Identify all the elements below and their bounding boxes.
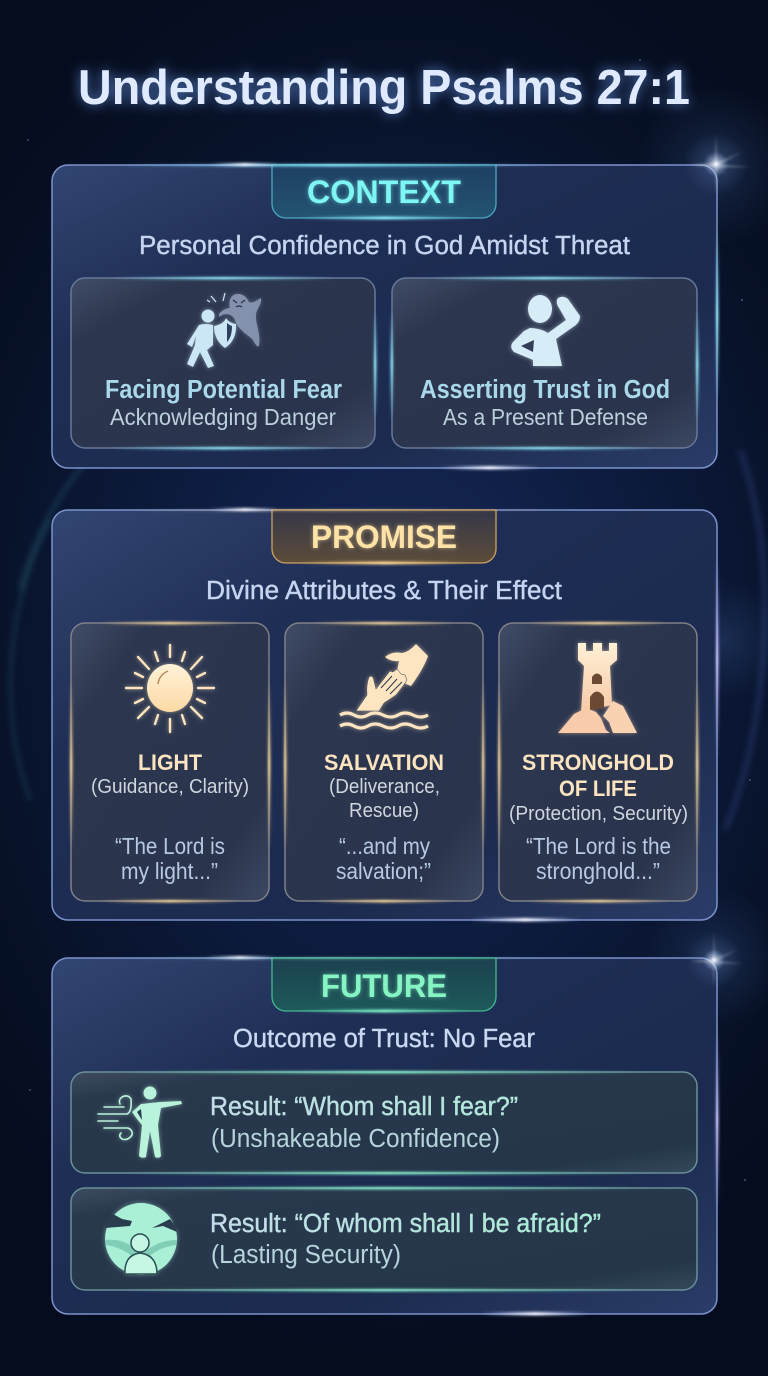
title: Understanding Psalms 27:1 (78, 61, 690, 115)
card: facing potential fear (71, 277, 376, 450)
icon: sun (126, 645, 214, 732)
tab: promise (272, 510, 496, 564)
card text: light: my light...” (121, 858, 218, 884)
card text: whom shall i fear (210, 1093, 518, 1153)
card text: of whom shall i be afraid: (Lasting Security) (211, 1241, 401, 1269)
card text: salvation: SALVATION (324, 750, 444, 775)
icon: tower on rock (558, 643, 637, 733)
icon: person raising arm (511, 295, 580, 366)
card: whom shall i fear (71, 1071, 697, 1174)
panel: promise (52, 508, 718, 922)
card text: of whom shall i be afraid: Result: “Of whom shall I be afraid?” (210, 1210, 601, 1238)
icon: person in landscape circle (105, 1203, 177, 1275)
card text: light (91, 750, 249, 884)
card text: stronghold: (Protection, Security) (509, 803, 688, 825)
card text: facing potential fear (105, 376, 342, 430)
icon: person standing against wind (98, 1086, 182, 1158)
card text: whom shall i fear: (Unshakeable Confidence) (211, 1125, 500, 1153)
tab: context: CONTEXT (307, 174, 461, 210)
card text: light: LIGHT (138, 750, 202, 775)
card text: light: “The Lord is (115, 833, 225, 859)
card text: stronghold: STRONGHOLD (522, 750, 674, 775)
subtitle: promise: Divine Attributes & Their Effect (206, 577, 562, 605)
tab: future (272, 958, 496, 1012)
card text: salvation: (Deliverance, (329, 776, 440, 798)
card text: stronghold: “The Lord is the (526, 833, 671, 859)
card text: light: (Guidance, Clarity) (91, 776, 249, 798)
card text: stronghold (509, 750, 688, 884)
panel: context (52, 163, 718, 470)
card: asserting trust in god (390, 277, 698, 450)
card text: stronghold: OF LIFE (559, 776, 637, 801)
panel: future (52, 956, 718, 1316)
card text: asserting trust: Asserting Trust in God (420, 376, 670, 404)
card: salvation (284, 622, 484, 902)
card text: salvation: salvation;” (336, 858, 431, 884)
card: stronghold of life (498, 622, 698, 902)
card text: of whom shall i be afraid (210, 1210, 601, 1269)
card text: facing potential fear: Acknowledging Danger (110, 404, 336, 430)
card: light (70, 622, 270, 902)
card text: facing potential fear: Facing Potential Fear (105, 376, 342, 404)
card: of whom shall i be afraid (71, 1187, 697, 1292)
tab: context (272, 165, 496, 220)
subtitle: future: Outcome of Trust: No Fear (233, 1025, 536, 1053)
lens flares (684, 132, 752, 988)
icon: reaching hands over water (340, 644, 428, 728)
icon: person with shield facing ghost (187, 293, 261, 368)
card text: whom shall i fear: Result: “Whom shall I fear?” (210, 1093, 518, 1121)
card text: asserting trust (420, 376, 670, 430)
tab: future: FUTURE (321, 968, 447, 1004)
card text: salvation (324, 750, 444, 884)
card text: asserting trust: As a Present Defense (443, 404, 648, 430)
subtitle: context: Personal Confidence in God Amidst Threat (139, 232, 630, 260)
tab: promise: PROMISE (311, 519, 457, 555)
card text: stronghold: stronghold...” (536, 858, 660, 884)
card text: salvation: “...and my (339, 833, 430, 859)
card text: salvation: Rescue) (349, 800, 419, 822)
